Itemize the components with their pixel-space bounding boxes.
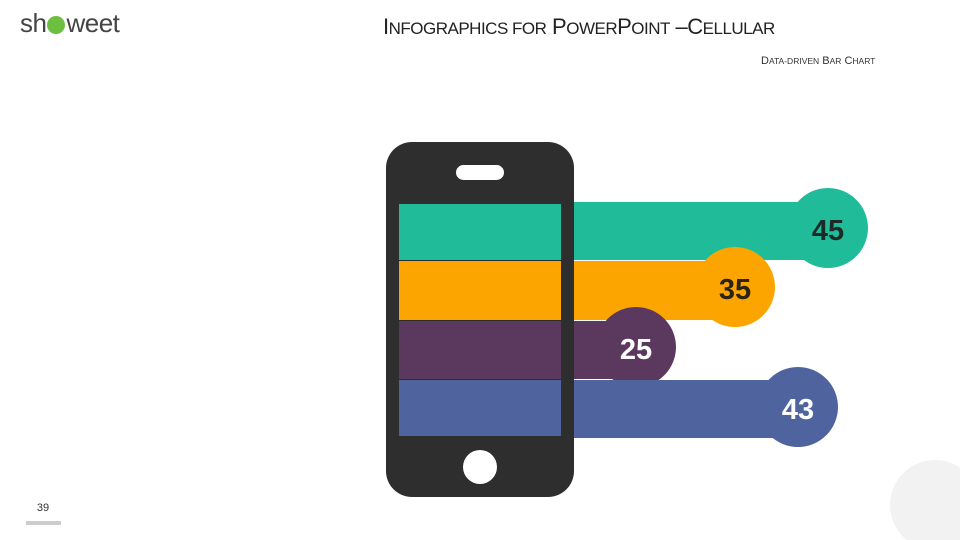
page number (26, 502, 61, 525)
bar: teal 45: 45 (812, 215, 844, 247)
bar: blue 43 (560, 367, 838, 447)
bar: blue 43: 43 (782, 394, 814, 426)
logo: sh weet (20, 8, 119, 38)
page number: 39 (37, 502, 49, 514)
bar: teal 45 (560, 188, 868, 268)
bar: orange 35 (560, 247, 775, 327)
icon: phone (386, 142, 574, 497)
watermark icon (890, 460, 960, 540)
subtitle: DATA-DRIVEN BAR CHART (761, 55, 875, 67)
bar: purple 25 (560, 307, 676, 387)
bar: purple 25: 25 (620, 334, 652, 366)
bar: orange 35: 35 (719, 274, 751, 306)
title: INFOGRAPHICS FOR POWERPOINT –CELLULAR (383, 14, 775, 39)
